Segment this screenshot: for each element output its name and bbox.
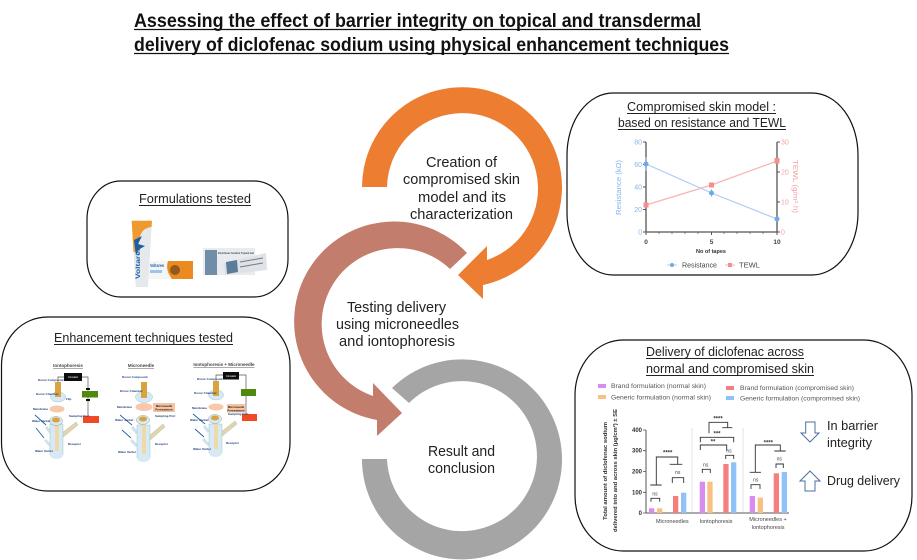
heading: delivery of diclofenac: normal and compromised skin: [646, 361, 814, 376]
title: [134, 11, 729, 56]
text: in barrier integrity: integrity: [827, 435, 872, 450]
line chart: resistance and TEWL vs tapes: 0: [644, 239, 648, 246]
legend: line chart: [667, 260, 760, 270]
diagram: iontophoresis plus microneedle cell: Constant: [226, 375, 236, 378]
title: delivery of diclofenac sodium using physical enhancement techniques: [134, 35, 729, 56]
diagram: iontophoresis plus microneedle cell: Membrane: [192, 406, 207, 410]
bar chart: total diclofenac delivered: 400: [632, 428, 643, 434]
diagram: iontophoresis cell: Sampling Port: [69, 414, 89, 418]
significance brackets: ns: [777, 456, 782, 462]
bar chart: total diclofenac delivered: 300: [632, 449, 643, 455]
diagram: iontophoresis plus microneedle cell: Water Outlet: [193, 447, 211, 451]
image: brand product tube and box: Voltaren: [150, 263, 164, 268]
text: in barrier integrity: [827, 418, 879, 450]
bar chart: total diclofenac delivered: Iontophoresis: [751, 525, 785, 531]
bar chart: total diclofenac delivered: Microneedles +: [749, 517, 787, 523]
diagram: microneedle cell: Membrane: [117, 405, 132, 409]
diagram: iontophoresis plus microneedle cell: Donor Compound: [197, 377, 223, 381]
significance brackets: ****: [713, 416, 723, 422]
diagram: microneedle cell: Pretreatment: [155, 408, 173, 412]
diagram: iontophoresis plus microneedle cell: Donor Chamber: [194, 391, 218, 395]
legend: bar chart: Brand formulation (compromised skin): [740, 385, 854, 392]
text: drug delivery: Drug delivery: [827, 473, 900, 488]
legend: bar chart: Generic formulation (compromised skin): [740, 396, 860, 402]
diagram: iontophoresis cell: Donor Chamber: [36, 392, 60, 396]
arrow: pink cycle arc: [294, 221, 467, 436]
text: creation step: characterization: [410, 207, 513, 223]
significance brackets: **: [711, 440, 716, 446]
diagram: iontophoresis cell: Donor Compound: [38, 378, 64, 382]
significance brackets: ****: [663, 450, 673, 456]
legend: line chart: TEWL: [739, 260, 760, 270]
icon: up arrow: [800, 471, 820, 491]
heading: compromised skin model: [618, 99, 786, 130]
panel: formulations tested: [87, 181, 288, 297]
diagram: iontophoresis cell: Water Outlet: [35, 449, 53, 453]
title: Assessing the effect of barrier integrity on topical and transdermal: [134, 11, 701, 32]
diagram: microneedle cell: Receptor: [155, 442, 169, 446]
panel: compromised skin model: [567, 93, 858, 275]
legend: bar chart: Brand formulation (normal skin): [611, 383, 706, 390]
diagram: iontophoresis cell: Water Jacket: [32, 419, 50, 423]
heading: delivery of diclofenac: [646, 344, 814, 376]
diagram: iontophoresis cell: Constant: [68, 376, 78, 379]
image: brand product tube and box: [132, 221, 193, 287]
diagram: microneedle cell: Water Outlet: [118, 450, 136, 454]
diagram: iontophoresis cell: Flip: [66, 397, 71, 401]
heading: delivery of diclofenac: Delivery of diclofenac across: [646, 344, 804, 359]
diagram: microneedle cell: [115, 363, 175, 462]
image: brand product tube and box: Voltaren: [136, 246, 142, 279]
image: generic product box and tube: [203, 248, 267, 275]
text: creation step: [403, 155, 520, 223]
significance brackets: ns: [726, 448, 732, 454]
text: testing step: Testing delivery: [347, 300, 447, 316]
text: creation step: Creation of: [426, 155, 498, 171]
bar chart: total diclofenac delivered: 100: [632, 490, 643, 496]
significance brackets: ns: [703, 462, 709, 468]
ring: grey result arc: [362, 359, 562, 559]
text: testing step: and iontophoresis: [339, 334, 455, 350]
legend: bar chart: [598, 383, 860, 402]
bar chart: total diclofenac delivered: [603, 409, 789, 532]
text: result step: conclusion: [428, 461, 495, 477]
diagram: iontophoresis plus microneedle cell: Receptor: [226, 441, 240, 445]
arrow: orange cycle arc: [362, 87, 562, 299]
line chart: resistance and TEWL vs tapes: 0: [638, 230, 642, 236]
heading: enhancement techniques: Enhancement techniques tested: [54, 330, 233, 345]
diagram: iontophoresis plus microneedle cell: Microneedle: [228, 405, 245, 409]
significance brackets: ns: [675, 470, 681, 476]
line chart: resistance and TEWL vs tapes: 80: [634, 140, 642, 146]
bar chart: total diclofenac delivered: 0: [639, 511, 643, 517]
text: creation step: compromised skin: [403, 172, 520, 188]
significance brackets: [650, 416, 786, 502]
panel: delivery of diclofenac: [575, 340, 912, 551]
bar chart: total diclofenac delivered: Total amount of diclofenac sodium: [603, 422, 609, 520]
diagram: iontophoresis plus microneedle cell: Pretreatment: [227, 408, 245, 412]
line chart: resistance and TEWL vs tapes: 20: [781, 170, 789, 176]
diagram: microneedle cell: Sampling Port: [155, 414, 175, 418]
line chart: resistance and TEWL vs tapes: 0: [781, 230, 785, 236]
heading: compromised skin model: Compromised skin model :: [627, 99, 776, 114]
diagram: iontophoresis cell: Receptor: [68, 442, 82, 446]
diagram: iontophoresis cell: [32, 363, 99, 459]
line chart: resistance and TEWL vs tapes: 60: [634, 162, 642, 169]
significance brackets: ns: [652, 492, 658, 498]
bar chart: total diclofenac delivered: Iontophoresis: [699, 519, 733, 525]
diagram: iontophoresis plus microneedle cell: Sampling Port: [228, 412, 248, 416]
image: generic product box and tube: Diclofenac Sodium Topical Gel: [218, 251, 254, 255]
text: result step: [428, 444, 495, 477]
legend: bar chart: Generic formulation (normal skin): [611, 394, 711, 402]
bar chart: total diclofenac delivered: Microneedles: [656, 519, 689, 525]
legend: line chart: Resistance: [682, 260, 717, 270]
text: creation step: model and its: [418, 190, 506, 206]
line chart: resistance and TEWL vs tapes: No of tapes: [696, 249, 726, 255]
diagram: iontophoresis plus microneedle cell: [190, 362, 257, 457]
panel: enhancement techniques tested: [2, 317, 290, 491]
line chart: resistance and TEWL vs tapes: 40: [634, 184, 642, 192]
significance brackets: ****: [764, 440, 774, 446]
line chart: resistance and TEWL vs tapes: TEWL (g/m²·h): [791, 160, 800, 214]
diagram: iontophoresis plus microneedle cell: Water Jacket: [190, 418, 208, 422]
text: in barrier integrity: In barrier: [827, 418, 879, 433]
significance brackets: ***: [713, 432, 721, 438]
diagram: iontophoresis cell: Iontophoresis: [53, 363, 83, 368]
line chart: resistance and TEWL vs tapes: 5: [710, 239, 714, 246]
text: testing step: using microneedles: [336, 317, 459, 333]
diagram: microneedle cell: Donor Chamber: [120, 389, 144, 393]
line chart: resistance and TEWL vs tapes: 10: [781, 200, 789, 206]
bar chart: total diclofenac delivered: delivered into and across skin (µg/cm²) ± SE: [612, 409, 619, 532]
line chart: resistance and TEWL vs tapes: 30: [781, 140, 789, 146]
diagram: iontophoresis cell: Membrane: [33, 407, 48, 411]
line chart: resistance and TEWL vs tapes: 20: [634, 207, 642, 214]
line chart: resistance and TEWL vs tapes: 10: [773, 239, 781, 246]
heading: compromised skin model: based on resistance and TEWL: [618, 115, 786, 130]
icon: down arrow: [801, 422, 819, 442]
diagram: iontophoresis plus microneedle cell: Iontophoresis + Microneedle: [193, 362, 255, 367]
diagram: microneedle cell: Microneedle: [156, 404, 173, 408]
significance brackets: ns: [753, 478, 759, 484]
line chart: resistance and TEWL vs tapes: [614, 140, 800, 270]
line chart: resistance and TEWL vs tapes: Resistance (kΩ): [614, 159, 623, 215]
text: result step: Result and: [428, 444, 495, 460]
bar chart: total diclofenac delivered: 200: [632, 470, 643, 476]
diagram: microneedle cell: Microneedle: [128, 363, 155, 368]
heading: formulations: Formulations tested: [139, 191, 251, 206]
text: testing step: [336, 300, 459, 350]
diagram: microneedle cell: Donor Compound: [122, 375, 148, 379]
diagram: microneedle cell: Water Jacket: [115, 418, 133, 422]
